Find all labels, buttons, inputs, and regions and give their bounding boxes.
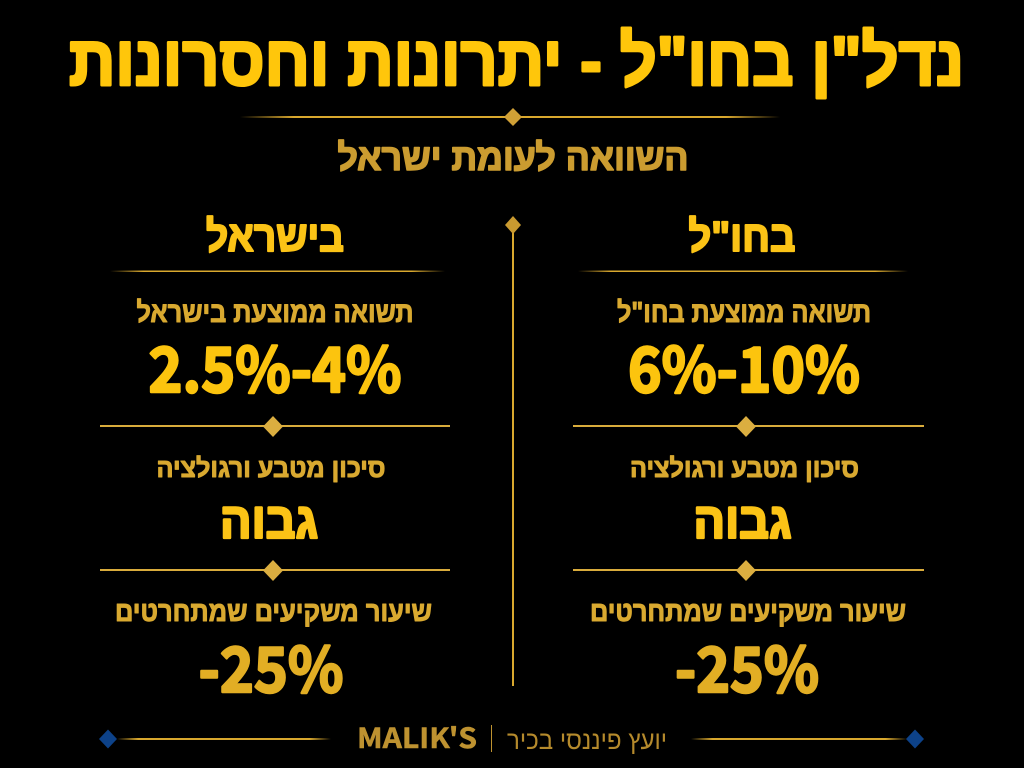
center vertical divider (505, 216, 521, 686)
israel divider 2 (100, 560, 450, 581)
abroad risk label: סיכון מטבע ורגולציה (630, 453, 859, 483)
israel heading rule (110, 270, 445, 272)
abroad risk value: גבוה (694, 493, 792, 549)
footer separator (491, 725, 492, 752)
abroad regret value: -25% (675, 620, 819, 710)
panel: israel (100, 213, 450, 710)
subtitle: השוואה לעומת ישראל (338, 137, 688, 178)
title: נדל"ן בחו"ל - יתרונות וחסרונות (69, 22, 964, 100)
footer right rule (691, 738, 907, 740)
abroad divider 2 (573, 560, 924, 581)
icon: right blue diamond (906, 730, 924, 748)
israel risk label: סיכון מטבע ורגולציה (156, 453, 386, 483)
abroad heading rule (578, 270, 908, 272)
israel regret value: -25% (198, 620, 344, 710)
israel heading: בישראל (206, 213, 344, 261)
abroad return value: 6%-10% (628, 320, 860, 410)
israel divider 1 (100, 416, 450, 437)
israel return label: תשואה ממוצעת בישראל (136, 297, 414, 329)
abroad regret label: שיעור משקיעים שמתחרטים (590, 596, 906, 627)
israel risk value: גבוה (220, 493, 318, 549)
footer left rule (117, 738, 331, 740)
israel regret label: שיעור משקיעים שמתחרטים (115, 596, 432, 627)
icon: left blue diamond (99, 730, 117, 748)
abroad return label: תשואה ממוצעת בחו"ל (617, 297, 871, 329)
footer tagline: יועץ פיננסי בכיר (507, 725, 667, 755)
footer (99, 717, 924, 757)
israel return value: 2.5%-4% (148, 320, 402, 410)
abroad heading: בחו"ל (688, 213, 796, 261)
panel: abroad (573, 213, 924, 710)
abroad divider 1 (573, 416, 924, 437)
brand name: MALIK'S (357, 717, 477, 757)
title divider (240, 108, 780, 126)
